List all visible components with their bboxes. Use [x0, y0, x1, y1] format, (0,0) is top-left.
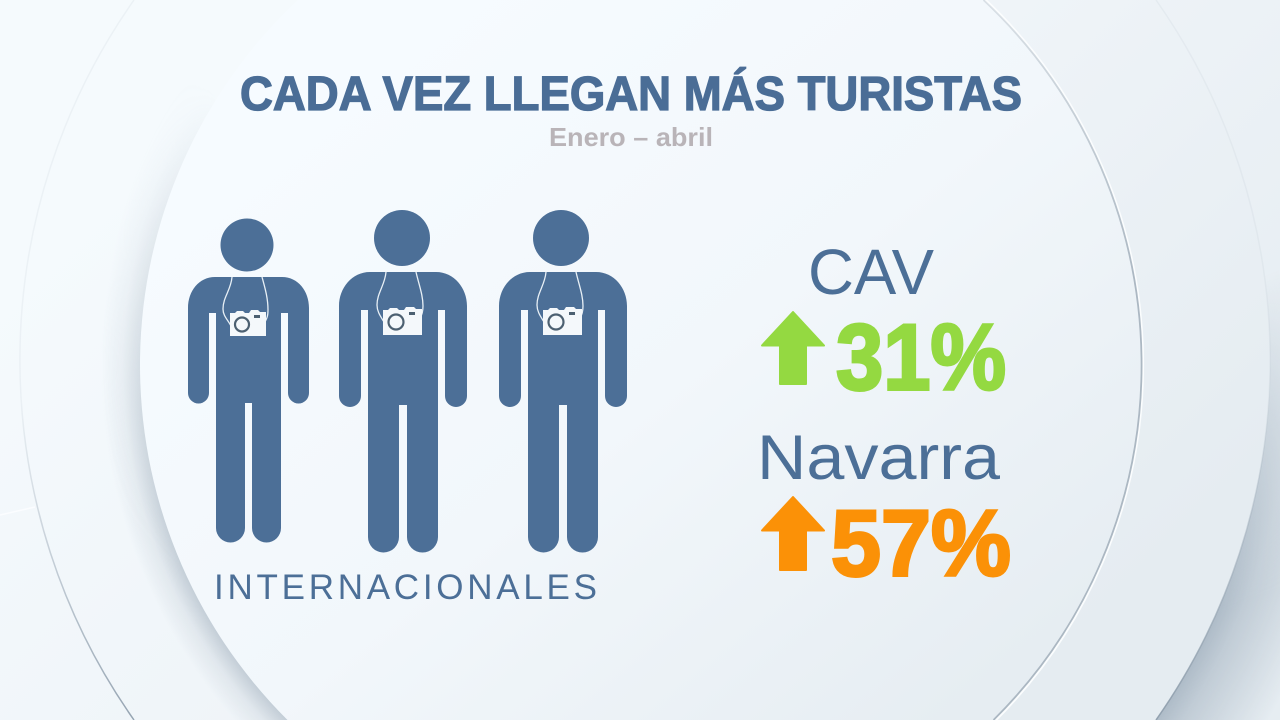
- tourist 3: [499, 210, 627, 552]
- region name Navarra: Navarra: [757, 423, 1001, 493]
- tourist 1: [188, 218, 309, 542]
- value 31%: 31%: [836, 304, 1006, 410]
- icon: green up arrow: [762, 312, 824, 384]
- tourists illustration: [188, 210, 627, 552]
- tourist 2: [339, 210, 467, 552]
- value 57%: 57%: [831, 490, 1011, 596]
- label: internacionales: INTERNACIONALES: [214, 568, 597, 607]
- subtitle: Enero – abril: [549, 122, 713, 152]
- region name CAV: CAV: [808, 236, 934, 308]
- stat: CAV: [762, 236, 1006, 410]
- title: CADA VEZ LLEGAN MÁS TURISTAS: [240, 67, 1022, 121]
- icon: orange up arrow: [762, 497, 824, 570]
- stat: Navarra: [757, 423, 1011, 596]
